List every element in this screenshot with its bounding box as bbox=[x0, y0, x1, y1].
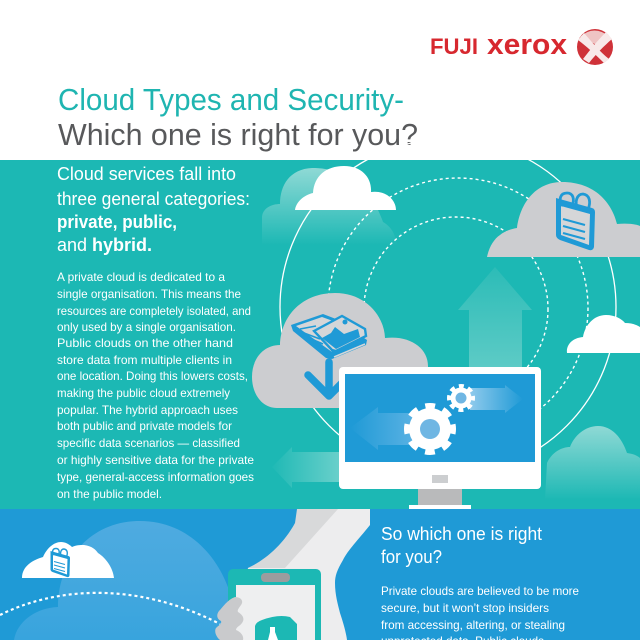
icon: big gear bbox=[408, 406, 452, 452]
logo: Fuji Xerox: FUJI bbox=[430, 34, 478, 59]
screen arrow left bbox=[350, 407, 425, 450]
body text: categories: store data from multiple clients in bbox=[57, 353, 232, 367]
sleeve bbox=[230, 509, 370, 640]
logo: Fuji Xerox bbox=[430, 29, 613, 65]
screen arrow right bbox=[470, 385, 523, 413]
body text: categories: popular. The hybrid approach uses bbox=[57, 403, 238, 417]
title: Cloud Types and Security- bbox=[58, 83, 404, 117]
title bbox=[58, 83, 418, 152]
heading: categories: Cloud services fall into bbox=[57, 164, 236, 184]
white cloud top bbox=[295, 166, 396, 210]
arrow: up bbox=[458, 267, 532, 368]
white cloud right bbox=[567, 315, 640, 353]
body text: categories: resources are completely isolated, and bbox=[57, 304, 251, 318]
small white cloud with notepad bbox=[22, 542, 114, 578]
faint cloud bottom right bbox=[545, 426, 640, 500]
body text: categories: one location. Doing this lowers costs, bbox=[57, 369, 248, 383]
icon: down arrow bbox=[308, 362, 345, 396]
monitor bbox=[339, 367, 541, 509]
body text: categories: both public and private models for bbox=[57, 419, 232, 433]
body text: categories: A private cloud is dedicated to a bbox=[57, 270, 225, 284]
heading: which one: So which one is right bbox=[381, 524, 542, 544]
grey cloud with image icon bbox=[252, 293, 428, 408]
body text: which one bbox=[381, 584, 579, 640]
icon: shield with key bbox=[255, 616, 297, 640]
orbit rings bbox=[280, 139, 616, 475]
body text: categories: single organisation. This means the bbox=[57, 287, 241, 301]
icon: stacked images bbox=[291, 314, 367, 359]
sleeve shadow bbox=[248, 509, 338, 568]
heading: which one bbox=[381, 524, 542, 567]
icon: notepad small bbox=[50, 548, 70, 577]
body text: categories: only used by a single organisation. bbox=[57, 320, 236, 334]
body text: categories: type, general-access information goes bbox=[57, 470, 254, 484]
icon: notepad bbox=[556, 193, 595, 250]
body text: categories: or highly sensitive data for the private bbox=[57, 453, 254, 467]
phone bbox=[228, 569, 321, 640]
dotted path bbox=[0, 593, 220, 624]
big pale cloud bbox=[14, 521, 232, 640]
body text: which one: from accessing, altering, or stealing bbox=[381, 618, 565, 632]
heading: categories: private, public, bbox=[57, 212, 177, 232]
arrow: left bbox=[272, 447, 340, 488]
body text: categories: specific data scenarios — classified bbox=[57, 436, 240, 450]
logo: Fuji Xerox: xerox bbox=[487, 29, 567, 61]
icon: small gear bbox=[449, 386, 473, 410]
title: Which one is right for you? bbox=[58, 118, 418, 152]
body text: categories: making the public cloud extremely bbox=[57, 386, 230, 400]
grey cloud with notepad bbox=[487, 182, 640, 257]
body text: categories: on the public model. bbox=[57, 487, 162, 501]
body text: categories: Public clouds on the other hand bbox=[57, 336, 233, 350]
faint cloud top left bbox=[262, 168, 397, 245]
fingers bbox=[215, 597, 243, 640]
panel: cloud categories bbox=[0, 139, 640, 509]
heading: which one: for you? bbox=[381, 547, 442, 567]
heading: categories bbox=[57, 164, 250, 255]
heading: categories: and hybrid. bbox=[57, 235, 152, 255]
body text: which one: Private clouds are believed to be more bbox=[381, 584, 579, 598]
body text: which one: secure, but it won’t stop insiders bbox=[381, 601, 549, 615]
heading: categories: three general categories: bbox=[57, 189, 250, 209]
panel: which one is right bbox=[0, 509, 640, 640]
body text: categories bbox=[57, 270, 254, 501]
